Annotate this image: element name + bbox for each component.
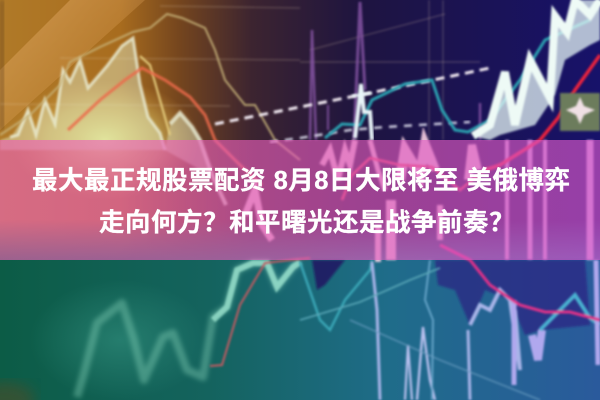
title xyxy=(32,166,571,239)
green marker box xyxy=(560,93,600,131)
yellow secondary line xyxy=(140,56,170,135)
red moving average line xyxy=(68,68,262,185)
red rising line lower xyxy=(210,258,310,366)
lower candle highlight xyxy=(213,262,300,320)
dashed trend line lower xyxy=(270,122,470,142)
centre white candle xyxy=(352,84,372,140)
right candlestick chart xyxy=(473,0,600,140)
tan moving average line xyxy=(0,14,300,160)
title: 最大最正规股票配资 8月8日大限将至 美俄博弈 xyxy=(32,167,571,195)
dark wedge left xyxy=(312,260,345,290)
left candlestick chart xyxy=(0,38,226,205)
pink translucent band xyxy=(0,140,600,260)
red rising line xyxy=(485,55,600,170)
lower right lines and spikes xyxy=(300,245,600,400)
pink candles inside band xyxy=(245,140,590,262)
purple spikes xyxy=(310,2,480,140)
teal line xyxy=(325,20,590,138)
lower left candlestick chart xyxy=(77,262,300,397)
dark wedge chart area xyxy=(435,260,590,335)
title: 走向何方？和平曙光还是战争前奏？ xyxy=(99,202,515,239)
grid lines xyxy=(0,0,480,140)
red line through band xyxy=(342,158,487,200)
dashed trend line upper xyxy=(215,68,490,124)
